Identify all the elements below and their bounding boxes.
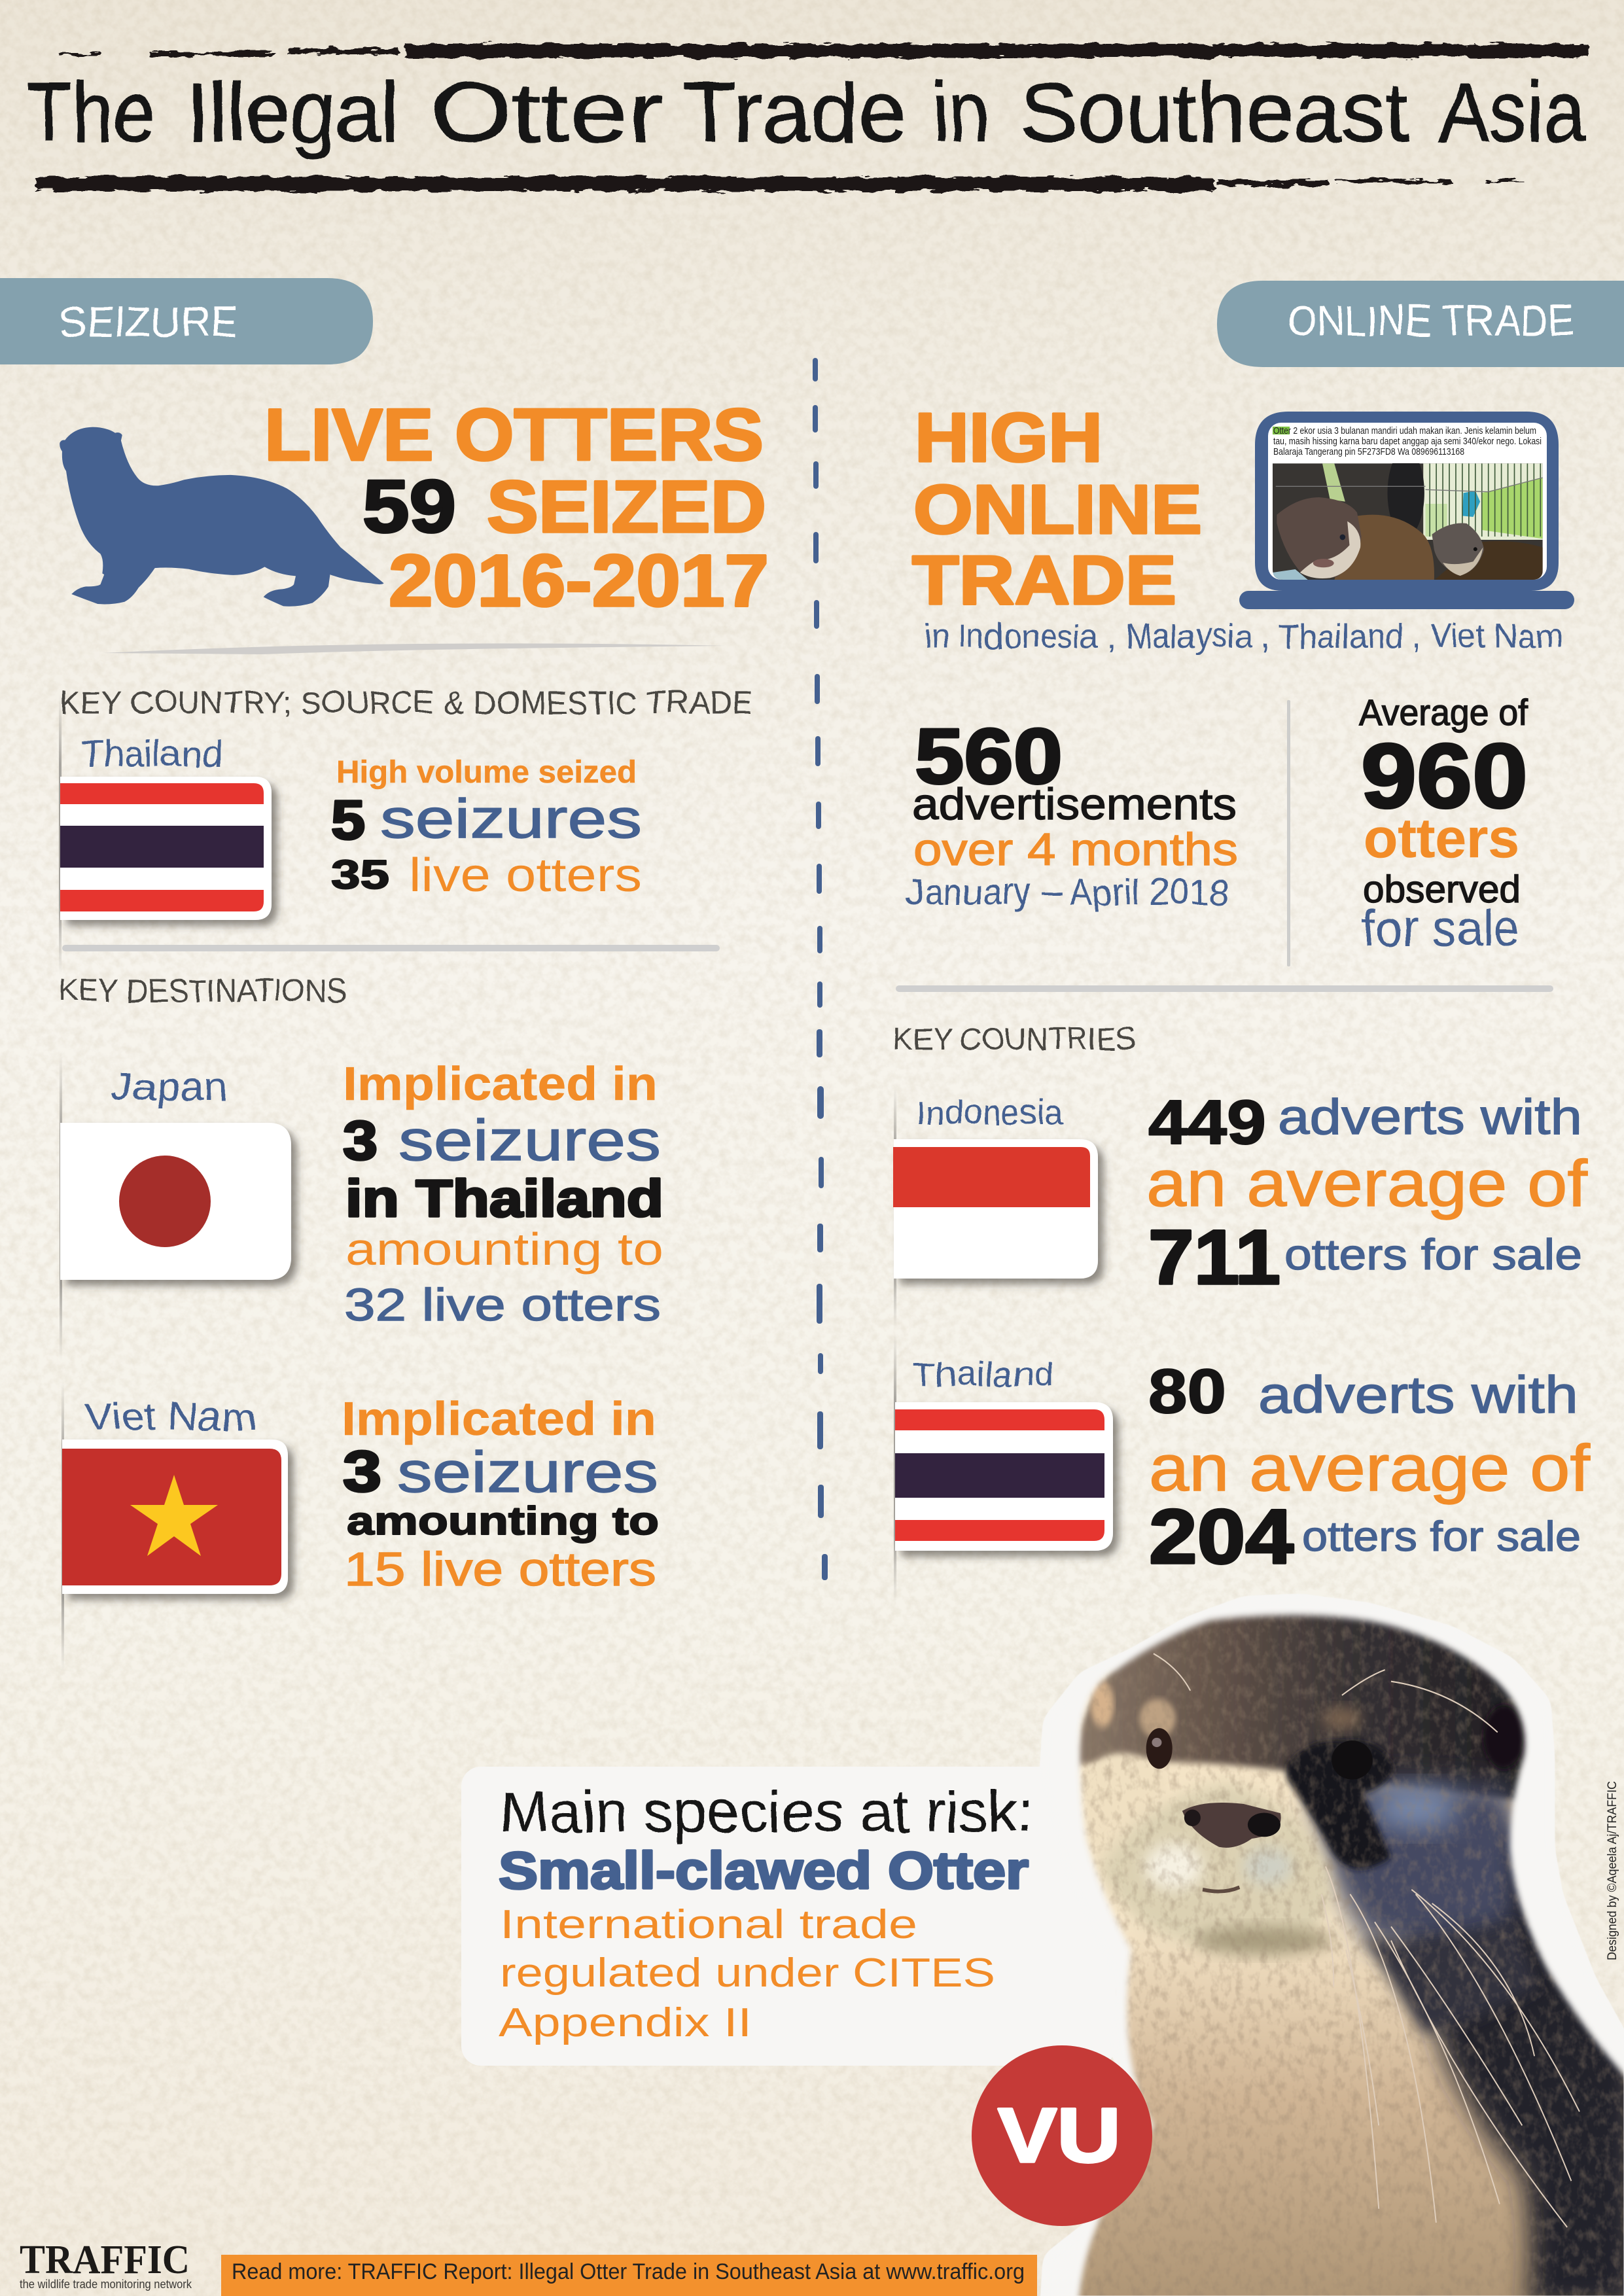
stat: 560 advertisements bbox=[905, 713, 1238, 912]
stats: Thailand seizures: High volume seized bbox=[336, 755, 637, 790]
label: Thailand online: Thailand bbox=[913, 1356, 1053, 1394]
label: Indonesia: Indonesia bbox=[916, 1094, 1064, 1132]
stats: Thailand seizures: live otters bbox=[409, 849, 642, 902]
badge: VU bbox=[972, 2045, 1152, 2226]
title: Southeast bbox=[1020, 64, 1409, 160]
stats: Viet Nam seizures: 15 live otters bbox=[344, 1544, 656, 1596]
icon: laptop with online advert: Otter 2 ekor usia 3 bulanan mandiri udah makan ikan. Jenis kelamin belum bbox=[1273, 425, 1536, 436]
title bbox=[26, 64, 1585, 160]
stats: Thailand seizures bbox=[331, 755, 642, 902]
heading: high online trade: HIGH bbox=[915, 399, 1103, 476]
tab: online trade: ONLINE TRADE bbox=[1286, 296, 1574, 345]
stats: Japan seizures: amounting to bbox=[345, 1224, 663, 1275]
stats: Indonesia adverts: 449 bbox=[1148, 1087, 1266, 1157]
stats: Thailand seizures: seizures bbox=[380, 788, 642, 849]
title: Trade bbox=[684, 64, 906, 160]
tab: online trade bbox=[1217, 281, 1624, 367]
stats: Viet Nam seizures bbox=[342, 1393, 659, 1596]
stat: 560 advertisements: January – April 2018 bbox=[905, 871, 1229, 912]
top brush stroke bbox=[59, 44, 1589, 58]
CITES note: International trade bbox=[500, 1902, 917, 1947]
label: Thailand: Thailand bbox=[80, 733, 222, 774]
title: Otter bbox=[430, 64, 663, 160]
subheading: key destinations: KEY DESTINATIONS bbox=[58, 974, 347, 1008]
icon: laptop with online advert: Balaraja Tangerang pin 5F273FD8 Wa 089696113168 bbox=[1273, 446, 1464, 457]
tab: seizure: SEIZURE bbox=[59, 297, 238, 347]
subheading: key countries: KEY COUNTRIES bbox=[893, 1022, 1137, 1057]
stats: Indonesia adverts: an average of bbox=[1146, 1147, 1587, 1220]
flag: Japan bbox=[60, 1123, 291, 1280]
stat: average of 960 otters: for sale bbox=[1363, 899, 1521, 957]
logo: TRAFFIC: TRAFFIC bbox=[20, 2238, 190, 2282]
bottom brush stroke bbox=[36, 177, 1525, 191]
divider swoosh bbox=[103, 643, 725, 654]
section: key country bbox=[59, 686, 753, 975]
species heading: Main species at risk: bbox=[500, 1779, 1034, 1844]
heading: live otters seized: 2016-2017 bbox=[389, 540, 769, 622]
stats: Japan seizures: 32 live otters bbox=[344, 1279, 661, 1330]
stats: Japan seizures: Implicated in bbox=[343, 1058, 658, 1110]
flag: Viet Nam bbox=[62, 1439, 288, 1594]
flag: Thailand bbox=[60, 777, 272, 920]
section: Thailand online bbox=[894, 1332, 1590, 1603]
icon: laptop with online advert bbox=[1239, 412, 1574, 609]
stat: 560 advertisements: advertisements bbox=[912, 779, 1237, 829]
advert photo bbox=[1273, 463, 1543, 580]
stats: Viet Nam seizures: seizures bbox=[397, 1439, 658, 1504]
logo: TRAFFIC: the wildlife trade monitoring network bbox=[20, 2278, 192, 2291]
heading: high online trade bbox=[912, 399, 1202, 619]
tab: seizure bbox=[0, 278, 373, 364]
dashed central divider bbox=[813, 358, 828, 1580]
stats: Thailand adverts: adverts with bbox=[1258, 1366, 1578, 1424]
stats: Japan seizures: in Thailand bbox=[345, 1169, 663, 1227]
stats: Japan seizures bbox=[343, 1058, 663, 1330]
title: Asia bbox=[1439, 64, 1585, 160]
heading: live otters seized bbox=[264, 394, 769, 622]
stats: Thailand seizures: 5 bbox=[331, 789, 365, 851]
species name: Small-clawed Otter bbox=[499, 1841, 1029, 1899]
heading: live otters seized: LIVE OTTERS bbox=[264, 394, 764, 476]
CITES note: Appendix II bbox=[499, 2000, 752, 2045]
section: Japan bbox=[60, 1053, 663, 1361]
stats: Thailand adverts: otters for sale bbox=[1302, 1513, 1581, 1560]
panel: main species at risk bbox=[461, 1767, 1116, 2066]
stats: Japan seizures: 3 bbox=[343, 1110, 378, 1171]
CITES note bbox=[499, 1902, 995, 2045]
stat: average of 960 otters bbox=[1359, 692, 1528, 957]
stats: Indonesia adverts: 711 bbox=[1148, 1214, 1280, 1301]
stat: average of 960 otters: otters bbox=[1364, 807, 1519, 869]
stats: Indonesia adverts: adverts with bbox=[1278, 1089, 1582, 1145]
title: Illegal bbox=[186, 64, 399, 160]
stat: average of 960 otters: observed bbox=[1363, 868, 1521, 911]
stat: average of 960 otters: Average of bbox=[1359, 692, 1528, 733]
stat: 560 advertisements: over 4 months bbox=[913, 824, 1238, 875]
section: Indonesia bbox=[893, 1086, 1587, 1328]
subheading: key country: KEY COUNTRY; SOURCE & DOMESTIC TRADE bbox=[60, 686, 753, 720]
stats: Viet Nam seizures: 3 bbox=[343, 1439, 381, 1504]
heading: high online trade: TRADE bbox=[912, 542, 1176, 619]
flag: Indonesia bbox=[893, 1139, 1098, 1279]
label: Japan: Japan bbox=[111, 1066, 228, 1108]
section: Viet Nam bbox=[62, 1381, 659, 1672]
icon: laptop with online advert: tau, masih hissing karna baru dapet anggap aja semi 340/ekor nego. Lokasi bbox=[1273, 436, 1542, 447]
CITES note: regulated under CITES bbox=[500, 1951, 995, 1996]
otter portrait bbox=[1039, 1593, 1624, 2296]
stats: Viet Nam seizures: amounting to bbox=[347, 1499, 659, 1543]
stat: 560 advertisements: 560 bbox=[915, 713, 1063, 800]
designer credit: Designed by ©Aqeela Aj/TRAFFIC bbox=[1606, 1781, 1619, 1960]
flag: Thailand online bbox=[895, 1402, 1113, 1551]
stats: Japan seizures: seizures bbox=[398, 1108, 661, 1173]
stats: Thailand seizures: 35 bbox=[331, 853, 389, 898]
heading: live otters seized: 59 bbox=[362, 465, 456, 548]
stats: Viet Nam seizures: Implicated in bbox=[342, 1393, 656, 1445]
stats: Thailand adverts: 204 bbox=[1149, 1494, 1294, 1580]
heading: live otters seized: SEIZED bbox=[487, 466, 766, 548]
badge: VU: VU bbox=[998, 2093, 1121, 2179]
read more banner: Read more: TRAFFIC Report: Illegal Otter Trade in Southeast Asia at www.traffic.org bbox=[232, 2259, 1025, 2284]
icon: otter silhouette bbox=[60, 427, 384, 607]
read more banner bbox=[221, 2255, 1037, 2296]
stat: average of 960 otters: 960 bbox=[1361, 724, 1528, 827]
heading: high online trade: ONLINE bbox=[913, 471, 1202, 548]
stats: Thailand adverts bbox=[1148, 1356, 1590, 1580]
title: in bbox=[932, 64, 989, 160]
label: Viet Nam: Viet Nam bbox=[84, 1396, 256, 1438]
countries list: in Indonesia , Malaysia , Thailand , Viet Nam bbox=[924, 618, 1562, 656]
stats: Thailand adverts: 80 bbox=[1148, 1356, 1226, 1426]
stats: Indonesia adverts bbox=[1146, 1087, 1587, 1301]
title: The bbox=[26, 64, 155, 160]
stats: Indonesia adverts: otters for sale bbox=[1284, 1230, 1582, 1279]
stats: Thailand adverts: an average of bbox=[1149, 1432, 1590, 1505]
